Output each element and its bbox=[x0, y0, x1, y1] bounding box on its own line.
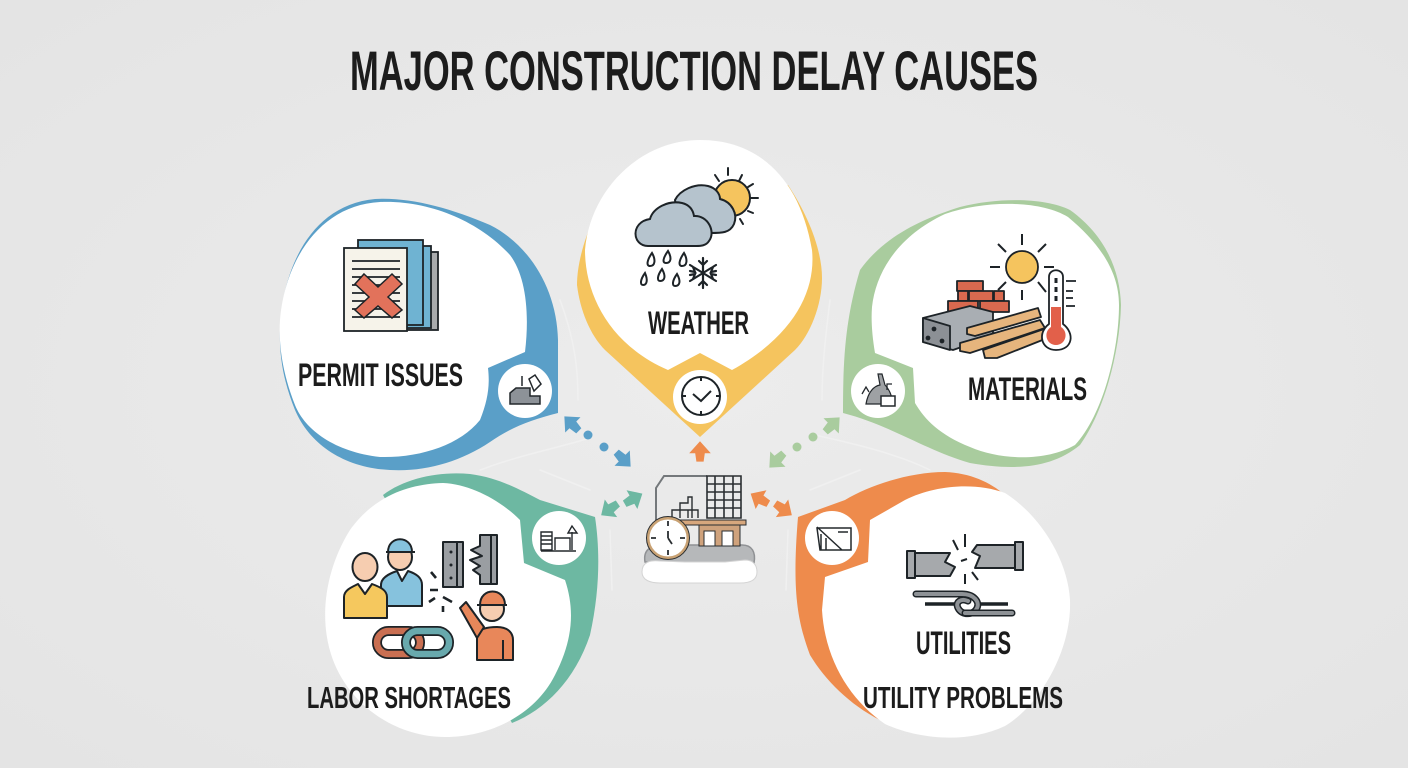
arrows: permit link bbox=[557, 409, 638, 474]
badge: buildings icon bbox=[532, 511, 586, 565]
panel: labor shortages bbox=[307, 473, 598, 737]
arrows: utility link bbox=[745, 484, 798, 524]
icon: workers broken beam and chain bbox=[344, 535, 513, 660]
icon: sun clouds rain and snow bbox=[636, 168, 758, 288]
label: utility problems: UTILITY PROBLEMS bbox=[863, 680, 1063, 715]
icon: bricks beam lumber sun thermometer bbox=[923, 234, 1076, 358]
panel: permit issues bbox=[280, 199, 558, 470]
icon: broken pipe and cable bbox=[907, 534, 1023, 614]
badge: blueprint icon bbox=[805, 511, 859, 565]
arrow: weather link bbox=[689, 441, 711, 462]
label: labor shortages: LABOR SHORTAGES bbox=[307, 680, 511, 715]
central construction site icon bbox=[642, 476, 757, 583]
badge: machine icon bbox=[498, 364, 552, 418]
label: materials: MATERIALS bbox=[968, 371, 1087, 407]
label: permit issues: PERMIT ISSUES bbox=[298, 357, 463, 393]
badge: factory icon bbox=[851, 364, 905, 418]
arrows: labor link bbox=[595, 484, 648, 524]
label: weather: WEATHER bbox=[648, 305, 749, 341]
icon: rejected permit documents bbox=[344, 240, 438, 331]
panel: materials bbox=[843, 200, 1121, 467]
arrows: materials link bbox=[762, 410, 847, 475]
badge: clock icon bbox=[673, 370, 727, 424]
panel: utility problems bbox=[795, 472, 1070, 738]
panel: weather bbox=[577, 140, 822, 437]
label: utilities: UTILITIES bbox=[916, 625, 1011, 661]
